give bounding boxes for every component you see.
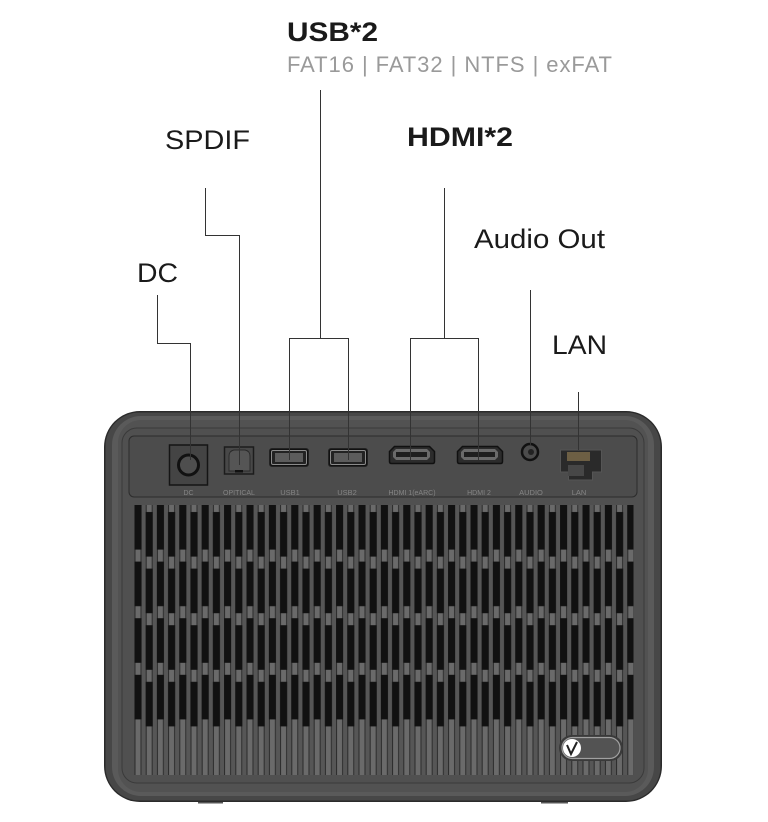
label: file systems: FAT16 | FAT32 | NTFS | exFAT (287, 52, 612, 77)
port: optical: OPITICAL (223, 490, 255, 497)
port: DC: DC (183, 490, 194, 497)
leader line: SPDIF (206, 188, 240, 465)
port: USB1: USB1 (280, 488, 300, 497)
foot: right (541, 802, 568, 804)
leader line: USB (290, 90, 348, 460)
label: LAN: LAN (552, 330, 607, 360)
port: LAN (560, 450, 602, 497)
label: USB*2: USB*2 (287, 17, 378, 47)
badge (559, 735, 623, 761)
label: HDMI*2: HDMI*2 (407, 122, 513, 152)
port: audio (519, 444, 543, 497)
leader line: LAN (578, 392, 580, 450)
port: USB2: USB2 (337, 488, 357, 497)
port: HDMI 2: HDMI 2 (467, 490, 491, 497)
port: USB1 (270, 448, 308, 497)
port: LAN: LAN (572, 488, 586, 497)
port: HDMI 2 (458, 446, 502, 497)
port: HDMI 1: HDMI 1(eARC) (388, 490, 436, 497)
port: audio: AUDIO (519, 488, 543, 497)
label: DC: DC (137, 258, 178, 288)
leader line: HDMI (410, 188, 478, 460)
leader line: DC (158, 295, 190, 460)
foot: left (198, 802, 223, 804)
leader line: Audio (530, 290, 532, 445)
projector body (104, 411, 662, 804)
port: optical (223, 447, 255, 497)
port: DC (170, 445, 208, 497)
vent slots (134, 505, 634, 775)
I/O panel (129, 436, 637, 497)
port: USB2 (328, 448, 368, 497)
port: HDMI 1 (388, 446, 436, 497)
label: SPDIF: SPDIF (165, 125, 250, 155)
label: Audio Out: Audio Out (474, 224, 606, 254)
